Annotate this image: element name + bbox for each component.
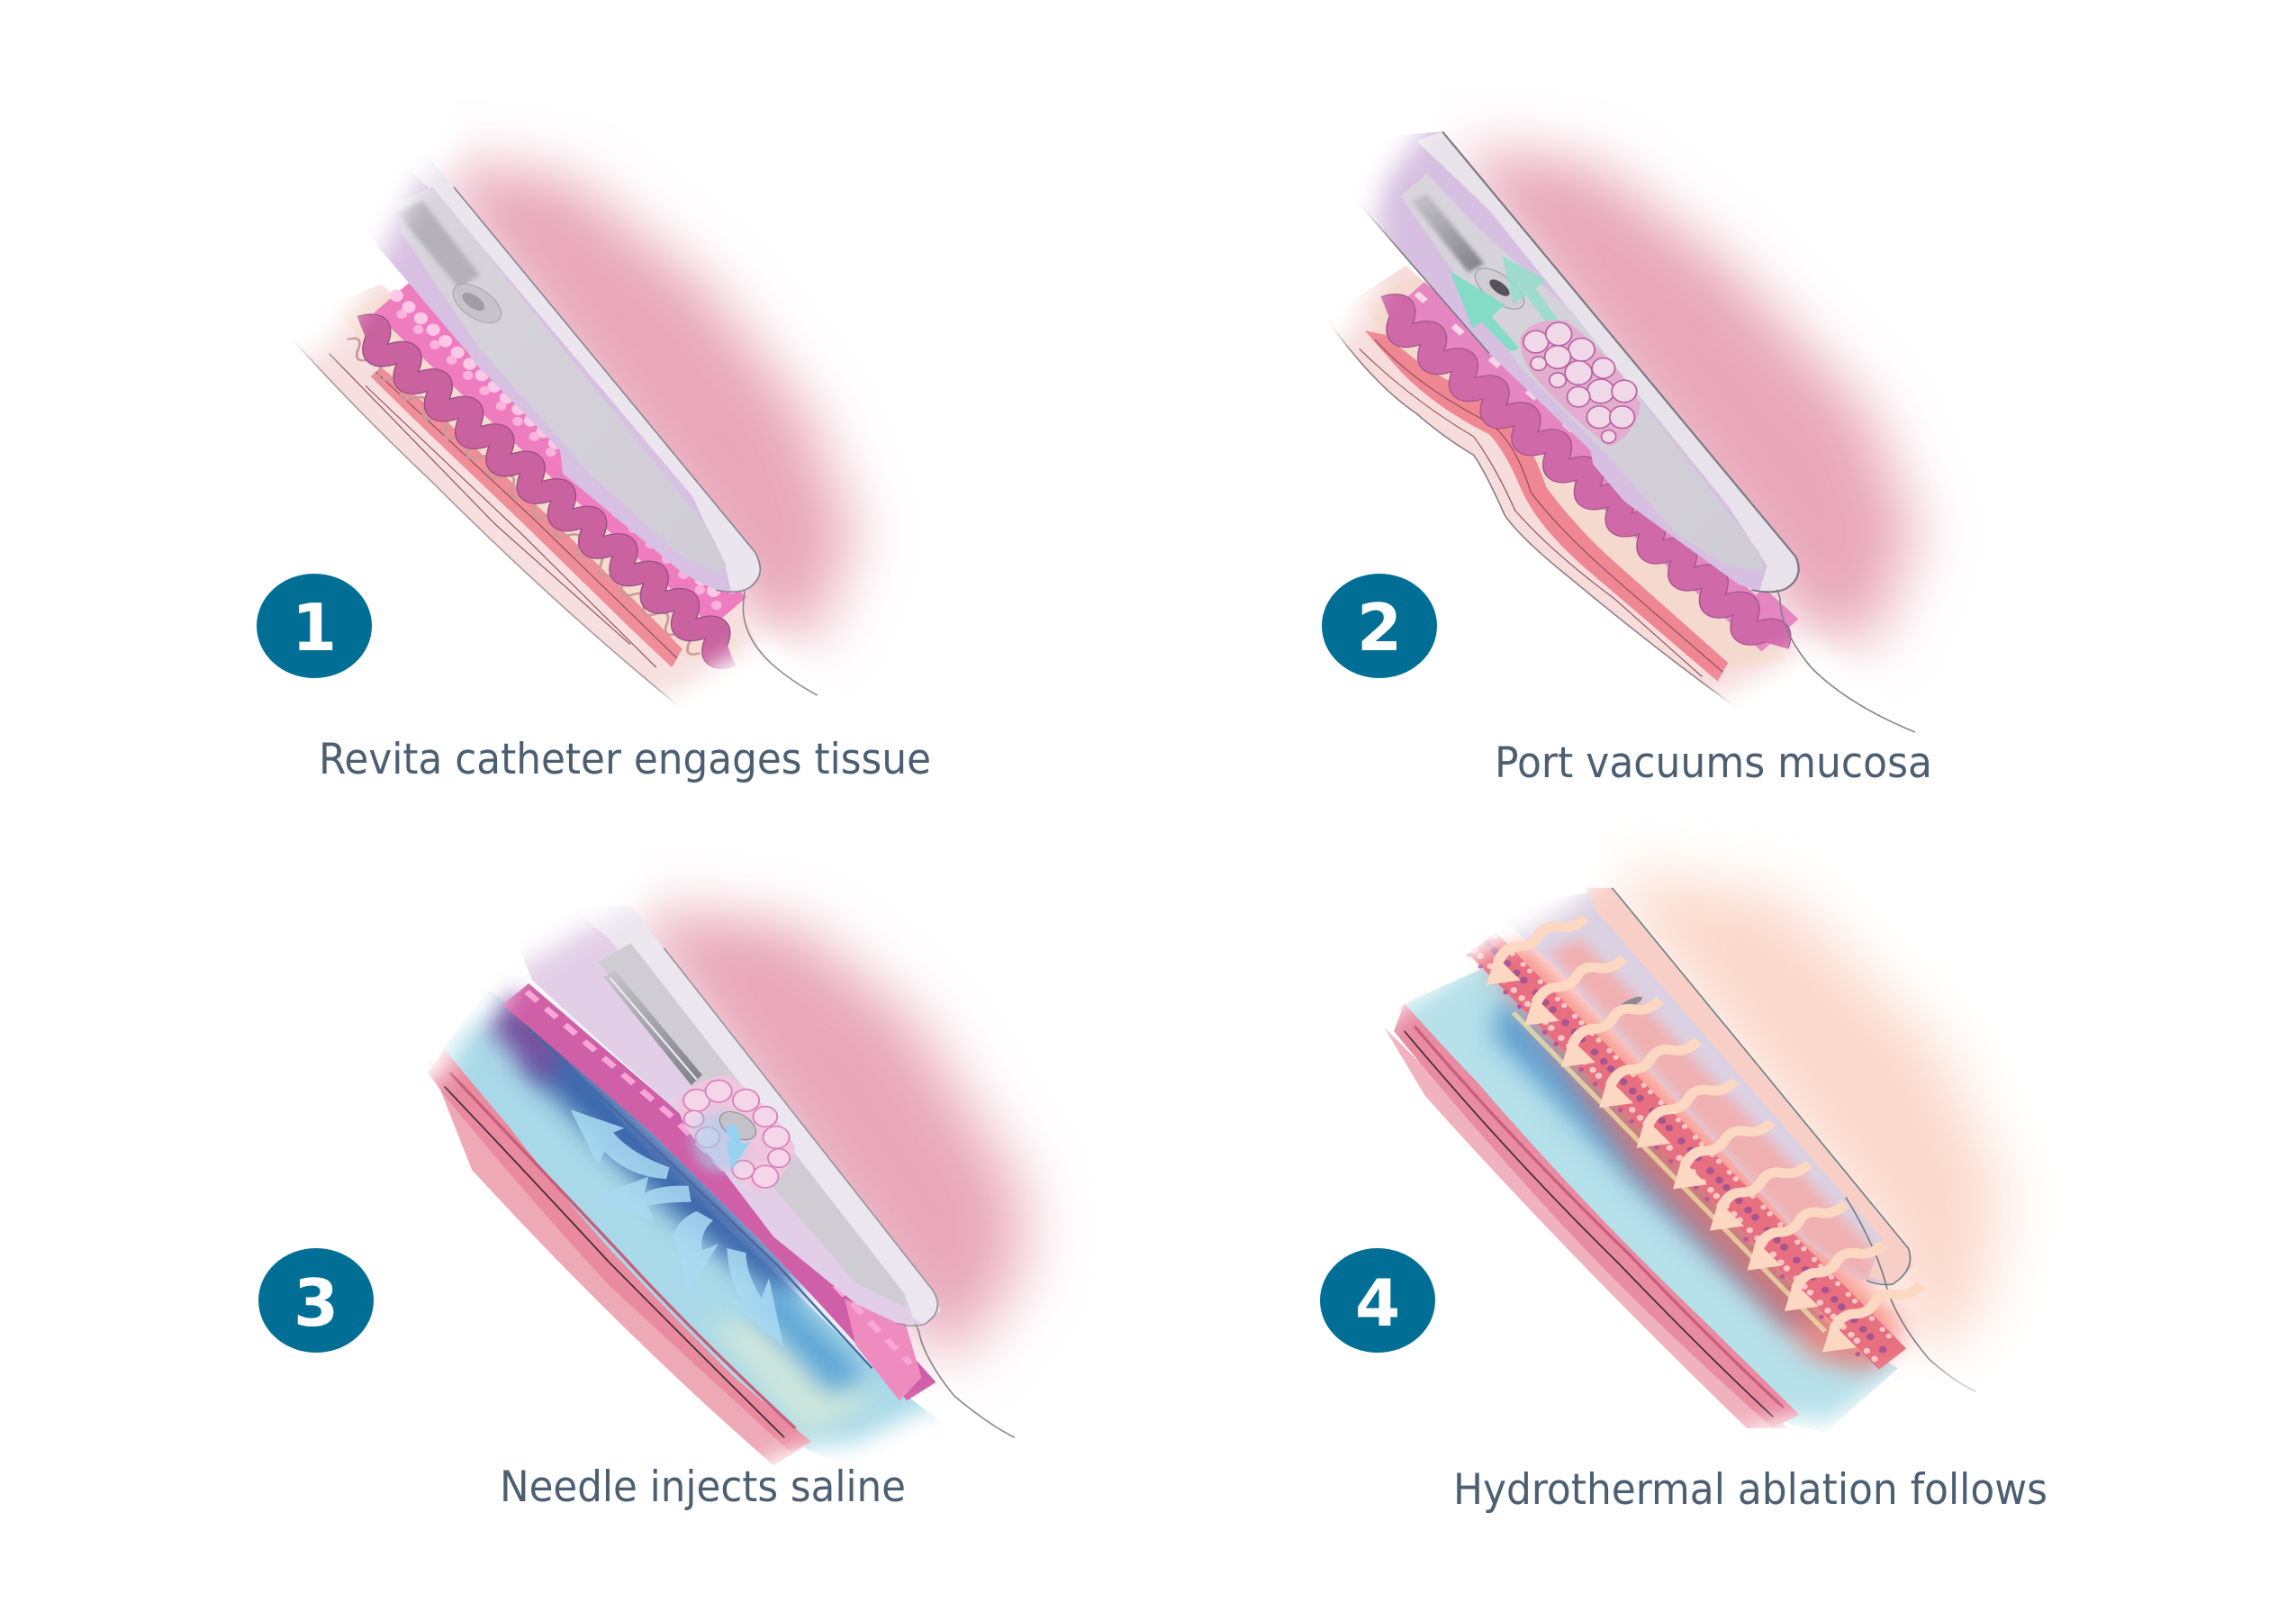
port slit — [1616, 994, 1644, 1012]
teal arrow back — [1502, 256, 1559, 326]
saline purple top — [488, 985, 565, 1091]
catheter grey inner — [1401, 173, 1764, 572]
mucosa slits — [1416, 294, 1780, 612]
badge 3: 3 — [294, 1265, 339, 1341]
submucosa line — [527, 1027, 872, 1368]
mottled pale cells — [1475, 950, 1877, 1362]
badge 2: 2 — [1357, 590, 1402, 666]
panel: step 2 port vacuums mucosa — [1240, 71, 1988, 810]
catheter body — [1493, 888, 1912, 1285]
port hole — [458, 289, 488, 314]
saline deep blue — [527, 1018, 800, 1304]
wall line beyond tip — [1697, 478, 1915, 732]
panel: step 1 catheter engages tissue — [204, 71, 900, 810]
muscle fibres — [445, 1086, 784, 1437]
mottled pale cells upper — [1496, 937, 1898, 1345]
lumen peach background — [1617, 869, 2002, 1363]
tissue wall base — [293, 284, 781, 709]
bottom fade — [746, 1405, 1080, 1576]
port ring — [1468, 261, 1532, 316]
wavy heat arrows — [1487, 918, 1921, 1352]
mucosa cells — [1523, 322, 1637, 443]
catheter clear sleeve — [576, 906, 941, 1325]
needle channel — [1411, 194, 1484, 273]
mottled purple cells — [1487, 943, 1887, 1354]
mottled purple cells lower — [1469, 955, 1869, 1366]
muscle fibres — [1405, 1031, 1773, 1417]
muscle fibres — [1360, 340, 1723, 677]
villi highlights lower row — [402, 314, 727, 614]
ablated mucosa band — [1482, 943, 1893, 1359]
saline arrow down-right — [719, 1248, 783, 1346]
heat arrow 6 — [1673, 1122, 1772, 1189]
pink villi band — [392, 298, 729, 612]
badge 4 — [1320, 1248, 1435, 1353]
muscle band — [428, 1049, 812, 1452]
outer wall line — [293, 340, 682, 709]
heat arrow 8 — [1747, 1203, 1846, 1271]
heat arrow 5 — [1637, 1081, 1735, 1148]
pale tissue near tip — [845, 1299, 921, 1400]
saline arrow up-left — [571, 1109, 669, 1179]
heat arrow 10 — [1822, 1285, 1921, 1352]
vacuumed mucosa — [1520, 321, 1641, 447]
tissue wall base — [1328, 266, 1806, 709]
catheter grey inner — [396, 187, 727, 573]
caption 4: Hydrothermal ablation follows — [1453, 1465, 2047, 1515]
big blue arrows — [571, 1109, 783, 1346]
pale submucosa — [339, 294, 745, 658]
saline arrow left — [593, 1177, 692, 1220]
catheter edge line — [1612, 888, 1910, 1285]
top fade — [1240, 71, 1448, 367]
muscle outer pale band — [1384, 1027, 1789, 1428]
badge 2 — [1322, 574, 1437, 678]
pale submucosa — [1364, 275, 1785, 667]
lumen pink background — [1469, 146, 1915, 649]
muscle fibres — [329, 353, 677, 667]
caption 3: Needle injects saline — [500, 1463, 906, 1512]
muscle band — [371, 367, 682, 667]
saline pale end — [708, 1318, 872, 1437]
torus cells — [683, 1080, 790, 1188]
catheter edge line — [664, 948, 937, 1326]
catheter pink lower glow — [1550, 938, 1877, 1283]
catheter peach sleeve — [1586, 888, 1912, 1285]
muscle band — [1364, 331, 1728, 682]
muscle outer pale band — [428, 1059, 812, 1465]
lumen pink background — [454, 159, 854, 645]
mucosa torus — [677, 1075, 795, 1192]
teal arrow front — [1451, 271, 1519, 351]
lumen pink background — [642, 906, 1020, 1368]
catheter clear sleeve — [1416, 131, 1800, 592]
heat arrow 9 — [1785, 1244, 1884, 1311]
catheter lavender body — [1328, 131, 1800, 592]
bottom fade — [589, 639, 900, 810]
top fade — [1347, 837, 1612, 1059]
saline arrow down — [672, 1211, 719, 1292]
saline blue — [1493, 994, 1825, 1327]
wall line beyond tip — [1846, 1198, 1975, 1391]
badge 3 — [258, 1248, 374, 1353]
wall line beyond tip — [692, 492, 818, 695]
badge 4: 4 — [1355, 1265, 1400, 1341]
wall line beyond tip — [818, 1216, 1015, 1437]
connective tissue squiggle — [341, 335, 705, 658]
catheter lavender body — [505, 906, 941, 1325]
pink mucosa band — [1406, 298, 1780, 635]
heat arrow 7 — [1710, 1164, 1809, 1231]
injection bloom — [692, 1111, 745, 1173]
mucosa wave — [353, 320, 739, 663]
needle highlight — [610, 978, 697, 1080]
panel: step 3 needle injects saline — [379, 837, 1080, 1576]
small blue arrow — [724, 1124, 750, 1170]
saline blue lower — [752, 1281, 867, 1396]
saline base — [1399, 966, 1898, 1433]
mucosa wave outline — [353, 320, 739, 663]
catheter lower edge line — [1349, 192, 1489, 353]
needle — [603, 971, 702, 1085]
catheter lavender body — [349, 150, 761, 593]
top fade — [204, 71, 459, 367]
mucosa blob — [1520, 321, 1641, 447]
catheter grey inner — [598, 943, 905, 1308]
muscle outer fibres — [450, 1073, 795, 1428]
saline base — [439, 990, 944, 1465]
port hole — [1487, 276, 1513, 299]
catheter edge line — [1442, 131, 1799, 592]
heat arrow 4 — [1599, 1041, 1698, 1108]
mucosa wave — [1378, 300, 1785, 653]
caption 1: Revita catheter engages tissue — [319, 735, 931, 784]
bottom fade — [1624, 645, 1988, 810]
villi highlights — [396, 295, 724, 601]
heat arrow 1 — [1487, 918, 1585, 985]
caption 2: Port vacuums mucosa — [1495, 738, 1932, 788]
panel: step 4 hydrothermal ablation follows — [1347, 837, 2033, 1576]
muscle band — [1394, 1003, 1799, 1428]
top fade — [379, 837, 647, 1118]
port channel — [396, 201, 480, 289]
badge 1 — [257, 574, 372, 678]
heat arrow 2 — [1524, 958, 1623, 1026]
mucosa highlight — [527, 992, 910, 1363]
catheter clear sleeve — [407, 150, 761, 593]
yellow submucosa edge — [1514, 1012, 1825, 1331]
port hole — [713, 1106, 763, 1146]
mucosa band — [516, 994, 921, 1391]
badge 1: 1 — [292, 590, 337, 666]
bottom fade — [1722, 1363, 2033, 1576]
heat glow — [1482, 938, 1903, 1373]
catheter edge line — [454, 187, 760, 592]
mucosa wave outline — [1378, 300, 1785, 653]
outer wall line — [1328, 321, 1739, 709]
muscle inner fibres — [1415, 1027, 1784, 1408]
heat arrow 3 — [1561, 1001, 1660, 1067]
port ring — [445, 276, 509, 331]
